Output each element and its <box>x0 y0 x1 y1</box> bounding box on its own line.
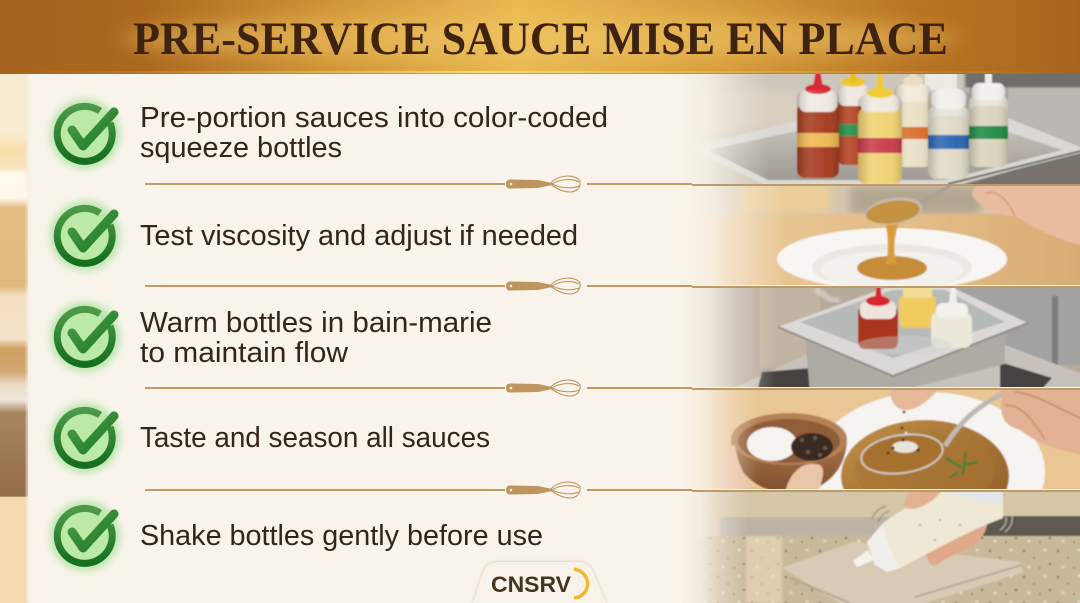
bain-marie bottle: red <box>858 283 898 349</box>
item 2: text: Test viscosity and adjust if needed <box>140 220 578 252</box>
bottle: white with green band <box>969 70 1008 167</box>
item 4: text: Taste and season all sauces <box>140 422 490 454</box>
photo fade into panel <box>678 74 788 603</box>
item 1: text: squeeze bottles <box>140 132 342 164</box>
spoon with sauce <box>859 392 1002 476</box>
item 1: check icon <box>50 99 120 169</box>
tilted squeeze bottle <box>853 487 1003 572</box>
item 5: text: Shake bottles gently before use <box>140 520 543 552</box>
folded napkin <box>782 542 1023 603</box>
divider with whisk 3 <box>145 380 692 396</box>
bottle: white with blue band <box>928 70 969 179</box>
herb garnish <box>945 452 978 478</box>
item 1: text: Pre-portion sauces into color-coded <box>140 102 608 134</box>
photo: colour-coded squeeze bottles on a tray <box>707 74 1080 184</box>
bain-marie bottle: white <box>931 283 972 348</box>
item 2: check icon <box>50 201 120 271</box>
item 3: text <box>140 307 492 369</box>
photo: bottles warming in a bain-marie <box>698 288 1080 387</box>
item 3: check icon <box>50 302 120 372</box>
item 3: text: Warm bottles in bain-marie <box>140 307 492 339</box>
photo: testing sauce viscosity with a spoon over a plate <box>700 186 1080 285</box>
seasoning bowl with salt and pepper <box>731 413 847 493</box>
bottle: red with yellow band <box>797 70 839 178</box>
item 4: check icon <box>50 403 120 473</box>
divider with whisk 4 <box>145 482 692 498</box>
bottle: cream with orange band <box>895 70 931 167</box>
header banner <box>0 0 1080 74</box>
bottle: red with green band <box>838 70 870 165</box>
logo tab <box>472 561 607 603</box>
logo tab: CNSRV <box>491 572 571 597</box>
item 3: text: to maintain flow <box>140 337 349 369</box>
photo: shaking a squeeze bottle above a napkin <box>676 487 1080 603</box>
item 1: text <box>140 102 608 164</box>
bottle: yellow with red band <box>858 70 902 184</box>
divider with whisk 2 <box>145 278 692 294</box>
photo: seasoning sauce with salt and pepper <box>693 390 1080 489</box>
hand under bottle <box>926 524 988 566</box>
item 5: check icon <box>50 501 120 571</box>
strip separators <box>692 184 1080 492</box>
bain-marie bottle: yellow <box>899 284 936 328</box>
title: PRE-SERVICE SAUCE MISE EN PLACE <box>133 13 948 65</box>
divider with whisk 1 <box>145 176 692 192</box>
bottle: back white <box>925 70 957 104</box>
